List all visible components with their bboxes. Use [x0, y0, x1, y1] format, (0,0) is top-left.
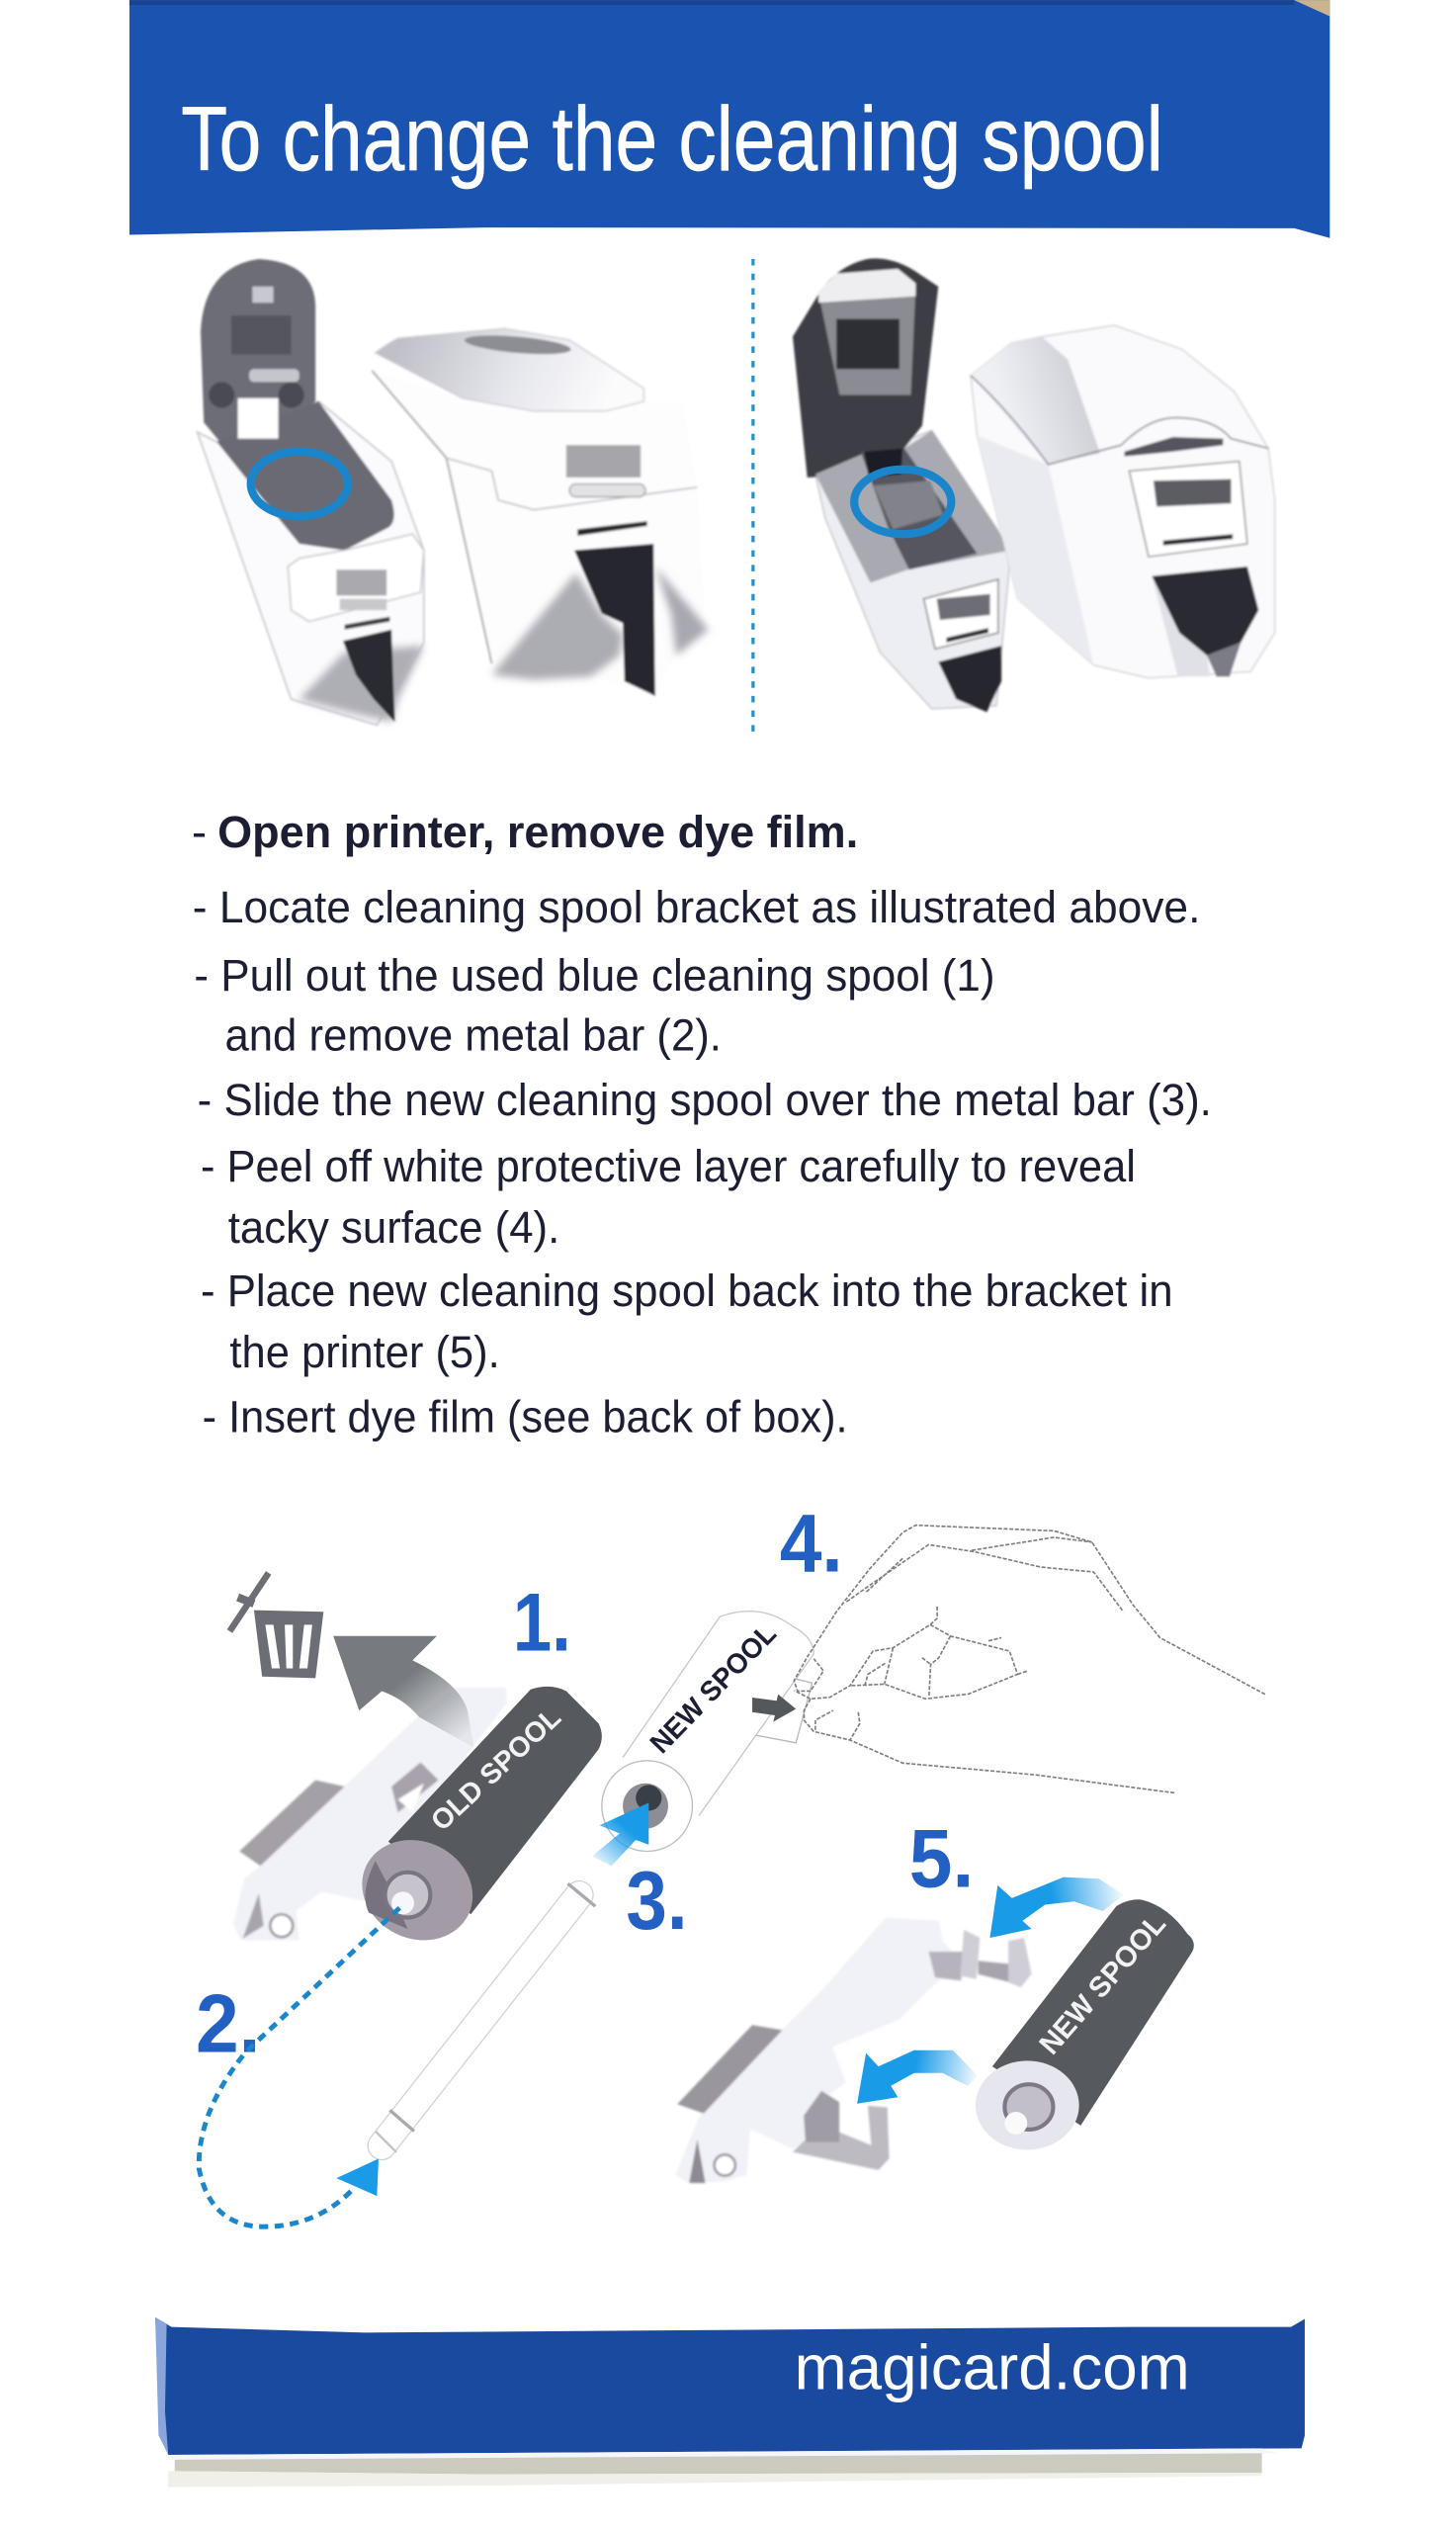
- arrow: discard old spool: [333, 1636, 474, 1748]
- number 3: 3.: [626, 1854, 688, 1947]
- step line: - Slide the new cleaning spool over the metal bar (3).: [198, 1075, 1212, 1125]
- step line: - Pull out the used blue cleaning spool (1): [194, 950, 995, 1001]
- title: To change the cleaning spool: [181, 89, 1163, 190]
- website: magicard.com: [795, 2332, 1190, 2403]
- arrow: peel direction: [752, 1695, 796, 1722]
- divider: [752, 259, 754, 734]
- bracket: new spool: [675, 1918, 1032, 2183]
- number 1: 1.: [513, 1576, 571, 1669]
- spool label: NEW SPOOL: [1033, 1907, 1172, 2061]
- footer band: [155, 2317, 1305, 2487]
- header band: [129, 0, 1329, 238]
- icon: blue ring, right: [854, 470, 951, 534]
- new spool, tacky layer: [602, 1612, 814, 1851]
- illustration: open printer, model two: [793, 258, 1011, 712]
- illustration: closed printer, model two: [971, 325, 1275, 678]
- bracket: old spool: [233, 1688, 506, 1940]
- illustration: hand: [794, 1526, 1265, 1792]
- icon: blue ring, left: [251, 452, 348, 516]
- panel: printer photos: [198, 258, 1275, 734]
- metal bar: [376, 1883, 595, 2152]
- arrow: insert bar: [592, 1802, 648, 1866]
- text block: instructions: [192, 807, 1212, 1442]
- step line: tacky surface (4).: [228, 1202, 559, 1253]
- step line: and remove metal bar (2).: [224, 1009, 722, 1060]
- panel: step diagram: [196, 1496, 1265, 2226]
- number 4: 4.: [780, 1496, 843, 1589]
- number 5: 5.: [909, 1811, 974, 1904]
- arrow: place spool lower: [857, 2051, 979, 2104]
- icon: trash can: [229, 1573, 323, 1678]
- old spool: [346, 1687, 602, 1958]
- number 2: 2.: [196, 1976, 261, 2069]
- step line: the printer (5).: [229, 1327, 500, 1377]
- arrow: place spool upper: [989, 1877, 1124, 1938]
- installed new spool: [976, 1899, 1194, 2149]
- spool label: OLD SPOOL: [425, 1702, 567, 1837]
- step line: - Locate cleaning spool bracket as illustrated above.: [193, 882, 1200, 932]
- step line: - Insert dye film (see back of box).: [203, 1392, 848, 1442]
- heading step: Open printer, remove dye film.: [217, 807, 858, 857]
- illustration: closed printer, model one: [372, 328, 709, 696]
- arrow: dotted removal path: [199, 1908, 399, 2226]
- spool label: NEW SPOOL: [644, 1618, 783, 1760]
- heading step: -: [192, 807, 207, 857]
- illustration: open printer, model one: [198, 259, 424, 725]
- step line: - Place new cleaning spool back into the bracket in: [201, 1266, 1173, 1316]
- step line: - Peel off white protective layer carefully to reveal: [201, 1141, 1136, 1191]
